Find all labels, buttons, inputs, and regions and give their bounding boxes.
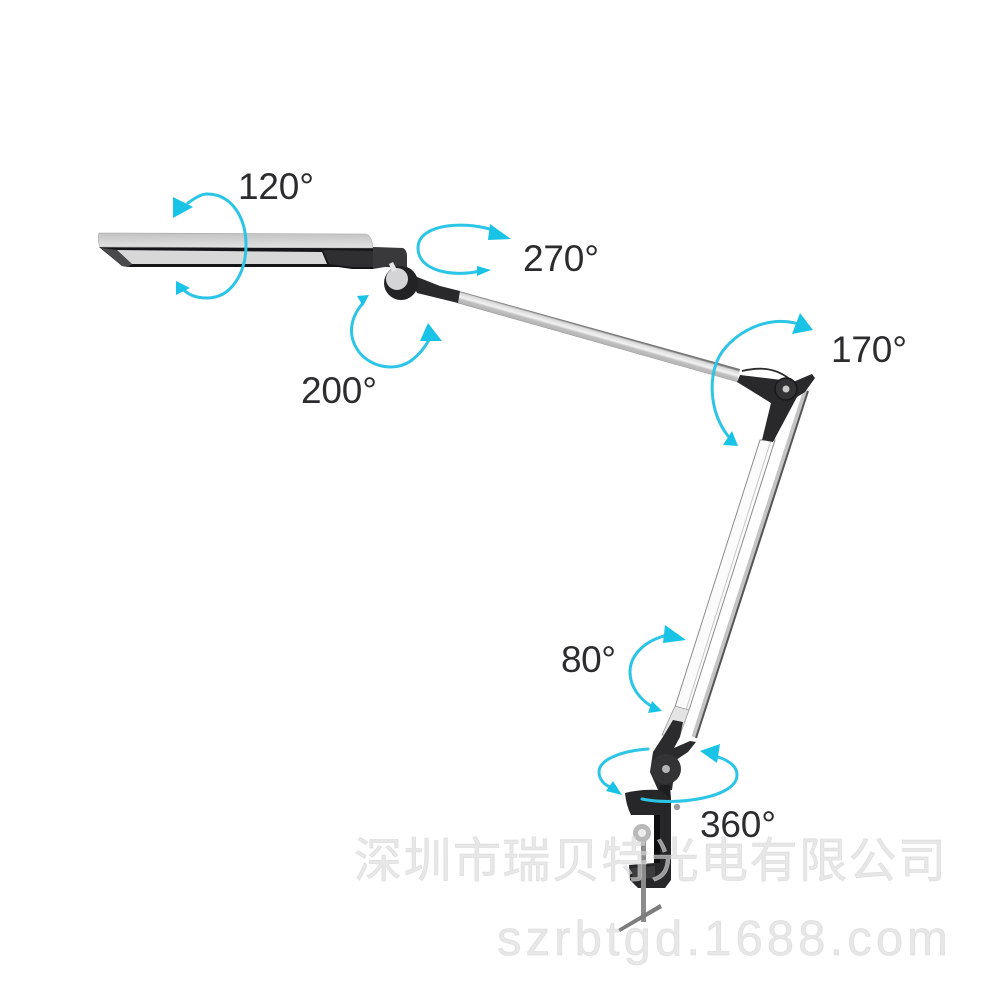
elbow joint <box>737 369 815 442</box>
label: 170 degrees: 170° <box>831 329 907 370</box>
upper silver arm <box>457 291 740 382</box>
watermark: company name: 深圳市瑞贝特光电有限公司 <box>354 835 946 888</box>
label: 80 degrees: 80° <box>561 639 616 680</box>
rotation arrow: 270 degrees <box>418 224 511 276</box>
rotation arrow: 200 degrees <box>351 295 442 367</box>
label: 200 degrees: 200° <box>301 370 377 411</box>
thin rod <box>694 390 808 738</box>
lamp <box>98 233 815 932</box>
rotation arrow: 80 degrees <box>630 625 686 713</box>
label: 360 degrees: 360° <box>700 804 776 845</box>
rotation arrow: 120 degrees <box>173 194 246 298</box>
head joint <box>384 262 460 303</box>
label: 120 degrees: 120° <box>238 166 314 207</box>
lower tube <box>662 440 775 735</box>
head neck <box>373 247 407 269</box>
watermark: website: szrbtgd.1688.com <box>497 912 948 966</box>
rotation arrow: 170 degrees <box>712 313 813 446</box>
clamp <box>618 790 680 932</box>
base joint <box>650 720 696 799</box>
rotation arrow: 360 degrees <box>599 744 737 801</box>
label: 270 degrees: 270° <box>523 238 599 279</box>
lamp head <box>98 233 373 269</box>
